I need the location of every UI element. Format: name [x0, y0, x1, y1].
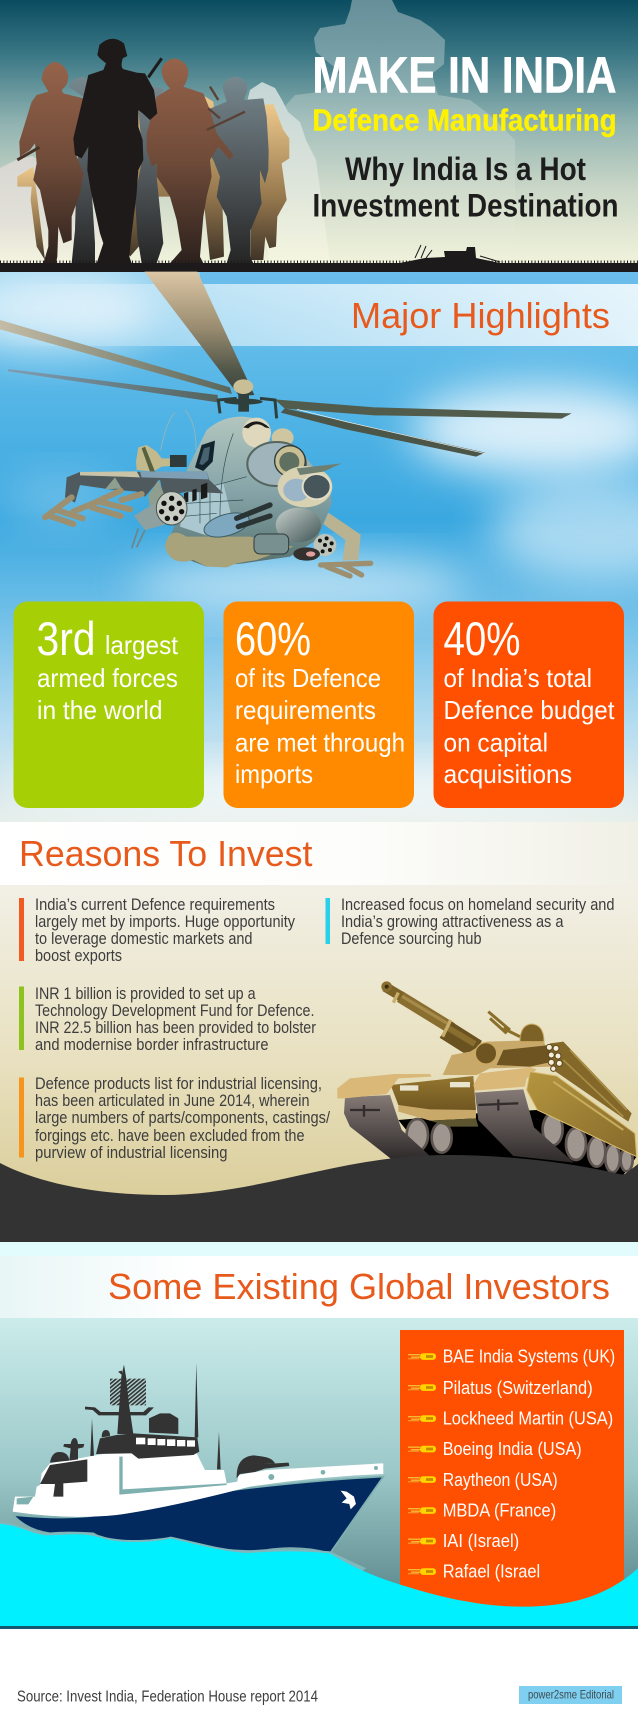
card: 40 percent: of India’s total: [444, 663, 592, 693]
card: 40 percent: on capital: [444, 728, 548, 758]
rotor hub: [218, 379, 277, 418]
front hull: [391, 1076, 476, 1113]
card: 60 percent: 60%: [235, 612, 311, 665]
road wheels: [407, 1113, 633, 1172]
reason: homeland security: [326, 896, 614, 948]
card: 60 percent: of its Defence: [235, 663, 381, 693]
white superstructure and deck: [13, 1452, 383, 1517]
belly: [165, 533, 293, 567]
panel: major highlights sky: [0, 270, 638, 822]
reason: licensing: large numbers of parts/components, castings/: [35, 1109, 330, 1127]
chin fuel tank: [201, 508, 252, 542]
card: 40 percent: acquisitions: [444, 759, 572, 789]
reason: licensing: Defence products list for industrial licensing,: [35, 1075, 322, 1093]
reason: development fund: [19, 985, 316, 1054]
smoke dischargers: [546, 1044, 562, 1071]
stat cards: [14, 602, 624, 808]
reason: development fund: INR 22.5 billion has been provided to bolster: [35, 1019, 316, 1037]
investor: Rafael: Rafael (Israel: [443, 1562, 540, 1582]
reason: imports: boost exports: [35, 947, 122, 965]
emblem: [341, 1491, 356, 1509]
rifle: centre soldier: [148, 58, 162, 77]
bridge: [96, 1433, 199, 1459]
investor: IAI: IAI (Israel): [443, 1531, 519, 1551]
hull: [13, 1477, 383, 1553]
tail boom and rear fin: [136, 445, 187, 472]
bridge windows: [136, 1438, 195, 1447]
reason: licensing: forgings etc. have been excluded from the: [35, 1127, 304, 1145]
rocket rails left: [45, 491, 142, 524]
deck shadow lines: [17, 1457, 227, 1504]
card: 3rd largest: 3rd: [36, 612, 96, 665]
investor: Raytheon: [408, 1470, 558, 1490]
card: 60 percent: are met through: [235, 728, 405, 758]
title: [312, 46, 618, 224]
icon: ship: [13, 1363, 383, 1553]
radar screen: [110, 1379, 146, 1405]
deck gun: [237, 1455, 289, 1478]
wing right: [323, 513, 361, 561]
card: 3rd largest: armed forces: [37, 663, 178, 693]
reason: imports: [19, 896, 296, 965]
investors list panel: [400, 1330, 624, 1610]
soldier: brown right: [147, 58, 233, 263]
antenna arcs: [161, 410, 196, 450]
soldier: tan rear left: [17, 167, 45, 260]
investor: Lockheed: Lockheed Martin (USA): [443, 1408, 613, 1428]
panel: hero header: [0, 0, 638, 272]
soldier: grey rear centre: [135, 85, 164, 263]
small dome: [102, 1430, 110, 1437]
investor: Raytheon: Raytheon (USA): [443, 1470, 558, 1490]
investors list: [408, 1346, 615, 1582]
mast: [117, 1365, 133, 1434]
card: 40 percent: [434, 602, 624, 808]
rocket rails right: [321, 563, 371, 576]
fuselage panel lines: [180, 433, 247, 530]
reason: licensing: purview of industrial licensing: [35, 1144, 228, 1162]
heading: reasons to invest: Reasons To Invest: [19, 833, 312, 874]
reason: imports: India’s current Defence requirements: [35, 896, 275, 914]
card: 40 percent: Defence budget: [444, 695, 615, 725]
tagline line 1: Why India Is a Hot: [345, 151, 586, 187]
soldier: tan rear right: [250, 104, 289, 260]
investor: Pilatus: Pilatus (Switzerland): [443, 1378, 593, 1398]
investor: Rafael: [408, 1562, 540, 1582]
investor: IAI: [408, 1531, 519, 1551]
right fender: [473, 1067, 537, 1091]
cloud: large right cloud: [280, 0, 515, 272]
heading: some existing global investors: Some Existing Global Investors: [108, 1266, 610, 1307]
card: 3rd largest: [14, 602, 204, 808]
rear deck: [550, 1042, 632, 1122]
soldier: grey rear left: [68, 77, 97, 263]
dark ground wave: [0, 1155, 638, 1242]
rocket pod left: [132, 492, 187, 548]
source note: Source: Invest India, Federation House report 2014: [17, 1688, 318, 1706]
stub wing left: [65, 471, 223, 513]
right track: [475, 1089, 574, 1163]
reason: imports: largely met by imports. Huge opportunity: [35, 913, 296, 931]
portholes: [268, 1466, 378, 1480]
nose cannon: [297, 463, 342, 475]
rocket pod right: [293, 534, 336, 561]
reason: development fund: INR 1 billion is provided to set up a: [35, 985, 256, 1003]
left track: [344, 1095, 430, 1159]
heading band: [0, 822, 638, 885]
lower cockpit: [278, 466, 332, 507]
soldier: tan centre: [125, 93, 224, 260]
upper cockpit: [247, 442, 306, 486]
top strip: [200, 272, 638, 284]
heading band: [0, 1256, 638, 1318]
rear cross mast: [63, 1438, 84, 1461]
soldier: black centre: [73, 39, 157, 263]
card: 60 percent: imports: [235, 759, 313, 789]
sensor box: [254, 534, 289, 554]
reason: imports: to leverage domestic markets and: [35, 930, 252, 948]
rear cabin: [40, 1459, 87, 1497]
cloud: left cloud: [0, 156, 120, 268]
nose: [276, 508, 321, 542]
turret: [443, 1012, 560, 1075]
card: 3rd largest: largest: [105, 630, 179, 660]
icon: tank: [337, 981, 637, 1175]
panel: global investors: [0, 1242, 638, 1629]
left fender: [337, 1074, 432, 1098]
antennas: [90, 1363, 221, 1469]
side window: [195, 441, 215, 471]
reason: licensing: [19, 1075, 330, 1162]
reason: development fund: Technology Development Fund for Defence.: [35, 1002, 314, 1020]
heading band: [0, 284, 638, 346]
reason: licensing: has been articulated in June 2014, wherein: [35, 1092, 310, 1110]
fuselage: [170, 417, 332, 567]
investor: Boeing: Boeing India (USA): [443, 1439, 582, 1459]
cloud: behind soldiers right: [245, 82, 330, 264]
soldier: brown left: [19, 62, 85, 263]
panel: reasons to invest: [0, 822, 638, 1242]
bottom rule: [0, 1626, 638, 1629]
card: 40 percent: 40%: [444, 612, 520, 665]
soldiers silhouettes: [17, 39, 289, 263]
gun barrel: [381, 981, 477, 1049]
editorial badge: [519, 1686, 622, 1704]
chin guns: [237, 505, 270, 527]
card: 3rd largest: in the world: [37, 695, 162, 725]
fuselage side panels: [180, 483, 233, 537]
radome box: [149, 1413, 178, 1434]
engine intakes: [242, 418, 294, 448]
ground strip with grass: [0, 245, 638, 272]
water: [0, 1522, 638, 1626]
reason: homeland security: Defence sourcing hub: [341, 930, 482, 948]
icon: helicopter body: [45, 379, 371, 576]
reason: homeland security: India’s growing attractiveness as a: [341, 913, 564, 931]
side skirt: [527, 1072, 637, 1157]
rifle: left soldier: [17, 147, 39, 160]
card: 60 percent: requirements: [235, 695, 376, 725]
card: 60 percent: [224, 602, 414, 808]
reason: development fund: and modernise border infrastructure: [35, 1036, 268, 1054]
soldier: grey front right: [203, 77, 269, 263]
mast crossbar: [85, 1407, 154, 1415]
heading: major highlights: Major Highlights: [351, 295, 610, 336]
icon: helicopter rotor blades: [0, 272, 572, 457]
rear dome: [50, 1452, 69, 1463]
editorial badge: power2sme Editorial: [528, 1688, 614, 1702]
investor: BAE: BAE India Systems (UK): [443, 1346, 615, 1366]
investor: MBDA: MBDA (France): [443, 1500, 556, 1520]
undercarriage shadow: [398, 1110, 637, 1175]
rifle: right soldier: [207, 87, 245, 130]
